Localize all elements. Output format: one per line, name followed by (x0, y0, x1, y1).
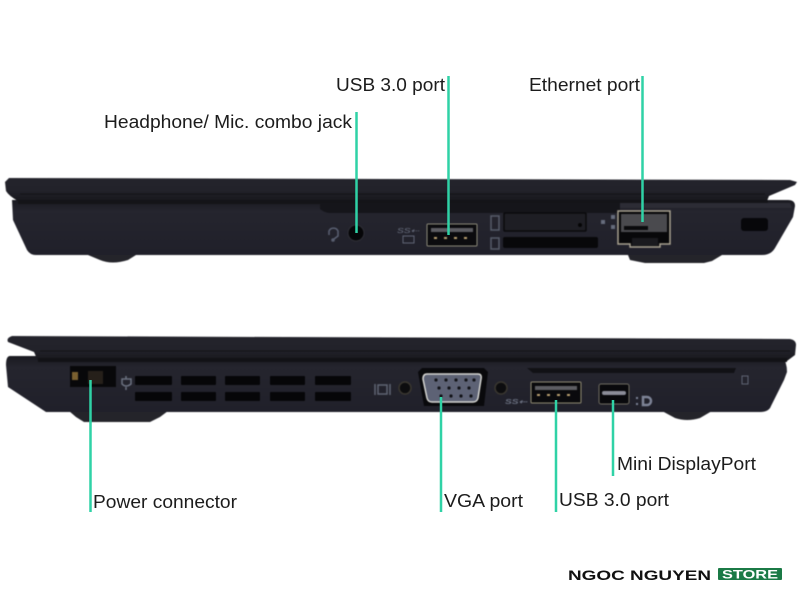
base (6, 356, 787, 412)
label: USB 3.0 bottom: USB 3.0 port (559, 490, 669, 510)
icon: battery (403, 236, 414, 243)
card slot cover (504, 213, 586, 231)
screw right (495, 382, 507, 394)
screw left (399, 382, 411, 394)
port: headphone jack (348, 225, 364, 241)
icon: DisplayPort symbol (637, 397, 651, 405)
lid (5, 178, 797, 201)
icon: card symbols (491, 216, 499, 249)
port: VGA (418, 368, 488, 406)
base (12, 200, 795, 255)
icon: network (601, 215, 615, 229)
icon: plug (122, 376, 131, 390)
laptop: left side view (6, 336, 796, 422)
rubber feet (88, 255, 722, 263)
icon: SS USB label: SS⇠ (397, 228, 421, 235)
icon: headphone (329, 228, 338, 241)
leader lines (90, 76, 642, 512)
security lock slot (741, 218, 768, 231)
brand name: NGOC NGUYEN (568, 567, 711, 583)
rubber feet (69, 411, 712, 422)
label: USB 3.0 top: USB 3.0 port (336, 75, 445, 95)
icon: display (375, 384, 390, 395)
label: Mini DisplayPort: Mini DisplayPort (617, 454, 756, 474)
port: power connector (70, 366, 116, 387)
store badge (718, 568, 782, 580)
laptop: right side view (5, 178, 797, 263)
label: VGA: VGA port (444, 491, 523, 511)
label: power connector: Power connector (93, 492, 237, 512)
store text: STORE (722, 570, 778, 582)
icon: SS USB label: SS⇠ (505, 399, 529, 406)
label: Ethernet: Ethernet port (529, 75, 640, 95)
port: USB 3.0 (427, 224, 477, 246)
port: Mini DisplayPort (599, 384, 629, 404)
lid (8, 336, 796, 361)
cooling vents (135, 376, 351, 401)
icon: lock (742, 376, 748, 384)
port: Ethernet (618, 211, 670, 247)
card reader slot (503, 237, 598, 248)
side slot (527, 368, 736, 373)
logo: store brand (568, 567, 782, 583)
port: USB 3.0 (531, 382, 581, 403)
label: headphone jack: Headphone/ Mic. combo jack (104, 112, 353, 132)
